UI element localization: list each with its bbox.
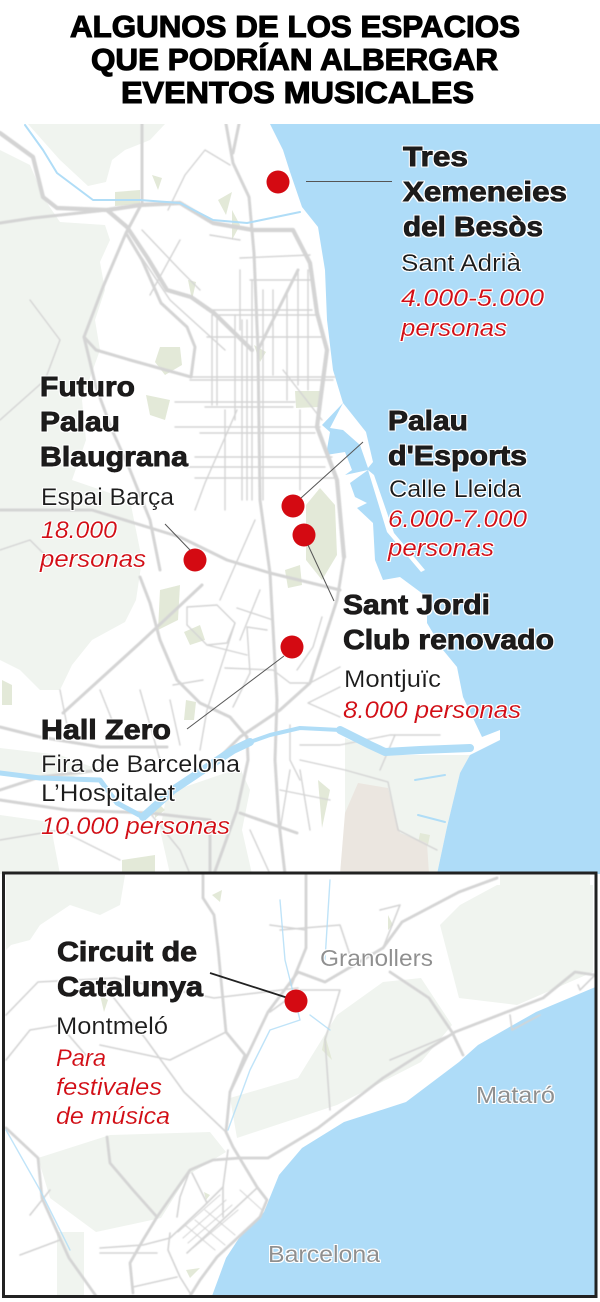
label: Hall Zero: Fira de Barcelona <box>41 751 241 778</box>
leader lines <box>165 182 392 729</box>
label: Futuro Palau Blaugrana: Espai Barça <box>41 484 175 511</box>
Red dot: Palau d'Esports <box>282 494 304 518</box>
forest areas <box>0 124 470 874</box>
label: Circuit de Catalunya <box>56 936 203 1130</box>
label: Tres Xemeneies del Besòs: del Besòs <box>403 211 543 242</box>
Red dot: Circuit de Catalunya <box>284 990 308 1012</box>
sea <box>270 124 600 874</box>
title: EVENTOS MUSICALES <box>121 75 474 110</box>
inset sea <box>212 985 600 1296</box>
label: Sant Jordi Club renovado: Sant Jordi <box>343 589 490 620</box>
label: Hall Zero: Hall Zero <box>41 714 171 745</box>
label: Futuro Palau Blaugrana: Blaugrana <box>40 441 188 472</box>
title: ALGUNOS DE LOS ESPACIOS <box>70 9 520 44</box>
label: Palau d'Esports <box>387 405 528 562</box>
inset forest areas <box>6 875 593 1296</box>
Red dot: Tres Xemeneies <box>266 170 290 194</box>
label: Futuro Palau Blaugrana: 18.000 <box>41 517 118 544</box>
label: Circuit de Catalunya: Para <box>56 1045 106 1072</box>
label: Sant Jordi Club renovado: Montjuïc <box>344 666 441 693</box>
inset city labels: Granollers <box>320 945 433 971</box>
title <box>70 9 520 110</box>
label: Tres Xemeneies del Besòs: Tres <box>403 141 468 172</box>
label: Palau d'Esports: 6.000-7.000 <box>388 506 528 533</box>
label: Sant Jordi Club renovado: Club renovado <box>343 624 554 655</box>
leader line: Circuit de Catalunya <box>210 973 288 998</box>
label: Futuro Palau Blaugrana <box>39 371 188 573</box>
label: Palau d'Esports: Calle Lleida <box>389 476 522 503</box>
inset parks <box>100 890 393 1278</box>
label: Tres Xemeneies del Besòs: personas <box>400 315 507 342</box>
panel: main map of Barcelona <box>0 124 600 874</box>
label: Tres Xemeneies del Besòs: 4.000-5.000 <box>401 285 545 312</box>
inset city labels <box>268 945 555 1267</box>
label: Palau d'Esports: personas <box>387 535 494 562</box>
inset city labels: Barcelona <box>268 1241 380 1267</box>
parks <box>2 175 430 874</box>
label: Circuit de Catalunya: Montmeló <box>56 1013 168 1040</box>
inset city labels: Mataró <box>476 1082 555 1108</box>
label: Sant Jordi Club renovado: 8.000 personas <box>343 697 521 724</box>
rivers <box>0 125 470 822</box>
inset rivers <box>6 880 330 1250</box>
port land <box>330 403 373 468</box>
label: Futuro Palau Blaugrana: personas <box>39 546 146 573</box>
label: Hall Zero: 10.000 personas <box>41 813 230 840</box>
label: Hall Zero <box>41 714 241 840</box>
airport <box>340 783 429 874</box>
label: Palau d'Esports: Palau <box>388 405 468 436</box>
label: Circuit de Catalunya: de música <box>56 1103 170 1130</box>
label: Circuit de Catalunya: Catalunya <box>57 971 203 1002</box>
title: QUE PODRÍAN ALBERGAR <box>91 42 498 77</box>
label: Circuit de Catalunya: Circuit de <box>57 936 197 967</box>
panel: inset regional map <box>3 872 600 1297</box>
road network <box>0 124 440 874</box>
inset frame <box>4 873 596 1296</box>
label: Circuit de Catalunya: festivales <box>56 1074 162 1101</box>
Red dot: Hall Zero <box>280 636 304 658</box>
label: Tres Xemeneies del Besòs <box>400 141 567 342</box>
label: Sant Jordi Club renovado <box>343 589 554 724</box>
label: Palau d'Esports: d'Esports <box>388 440 527 471</box>
inset road network <box>6 875 595 1296</box>
label: Futuro Palau Blaugrana: Futuro <box>40 371 135 402</box>
label: Hall Zero: L’Hospitalet <box>41 780 175 807</box>
label: Futuro Palau Blaugrana: Palau <box>40 406 120 437</box>
label: Tres Xemeneies del Besòs: Xemeneies <box>403 176 567 207</box>
Red dot: Palau Blaugrana <box>184 548 206 572</box>
Red dot: Sant Jordi Club <box>292 524 316 546</box>
label: Tres Xemeneies del Besòs: Sant Adrià <box>401 250 522 277</box>
